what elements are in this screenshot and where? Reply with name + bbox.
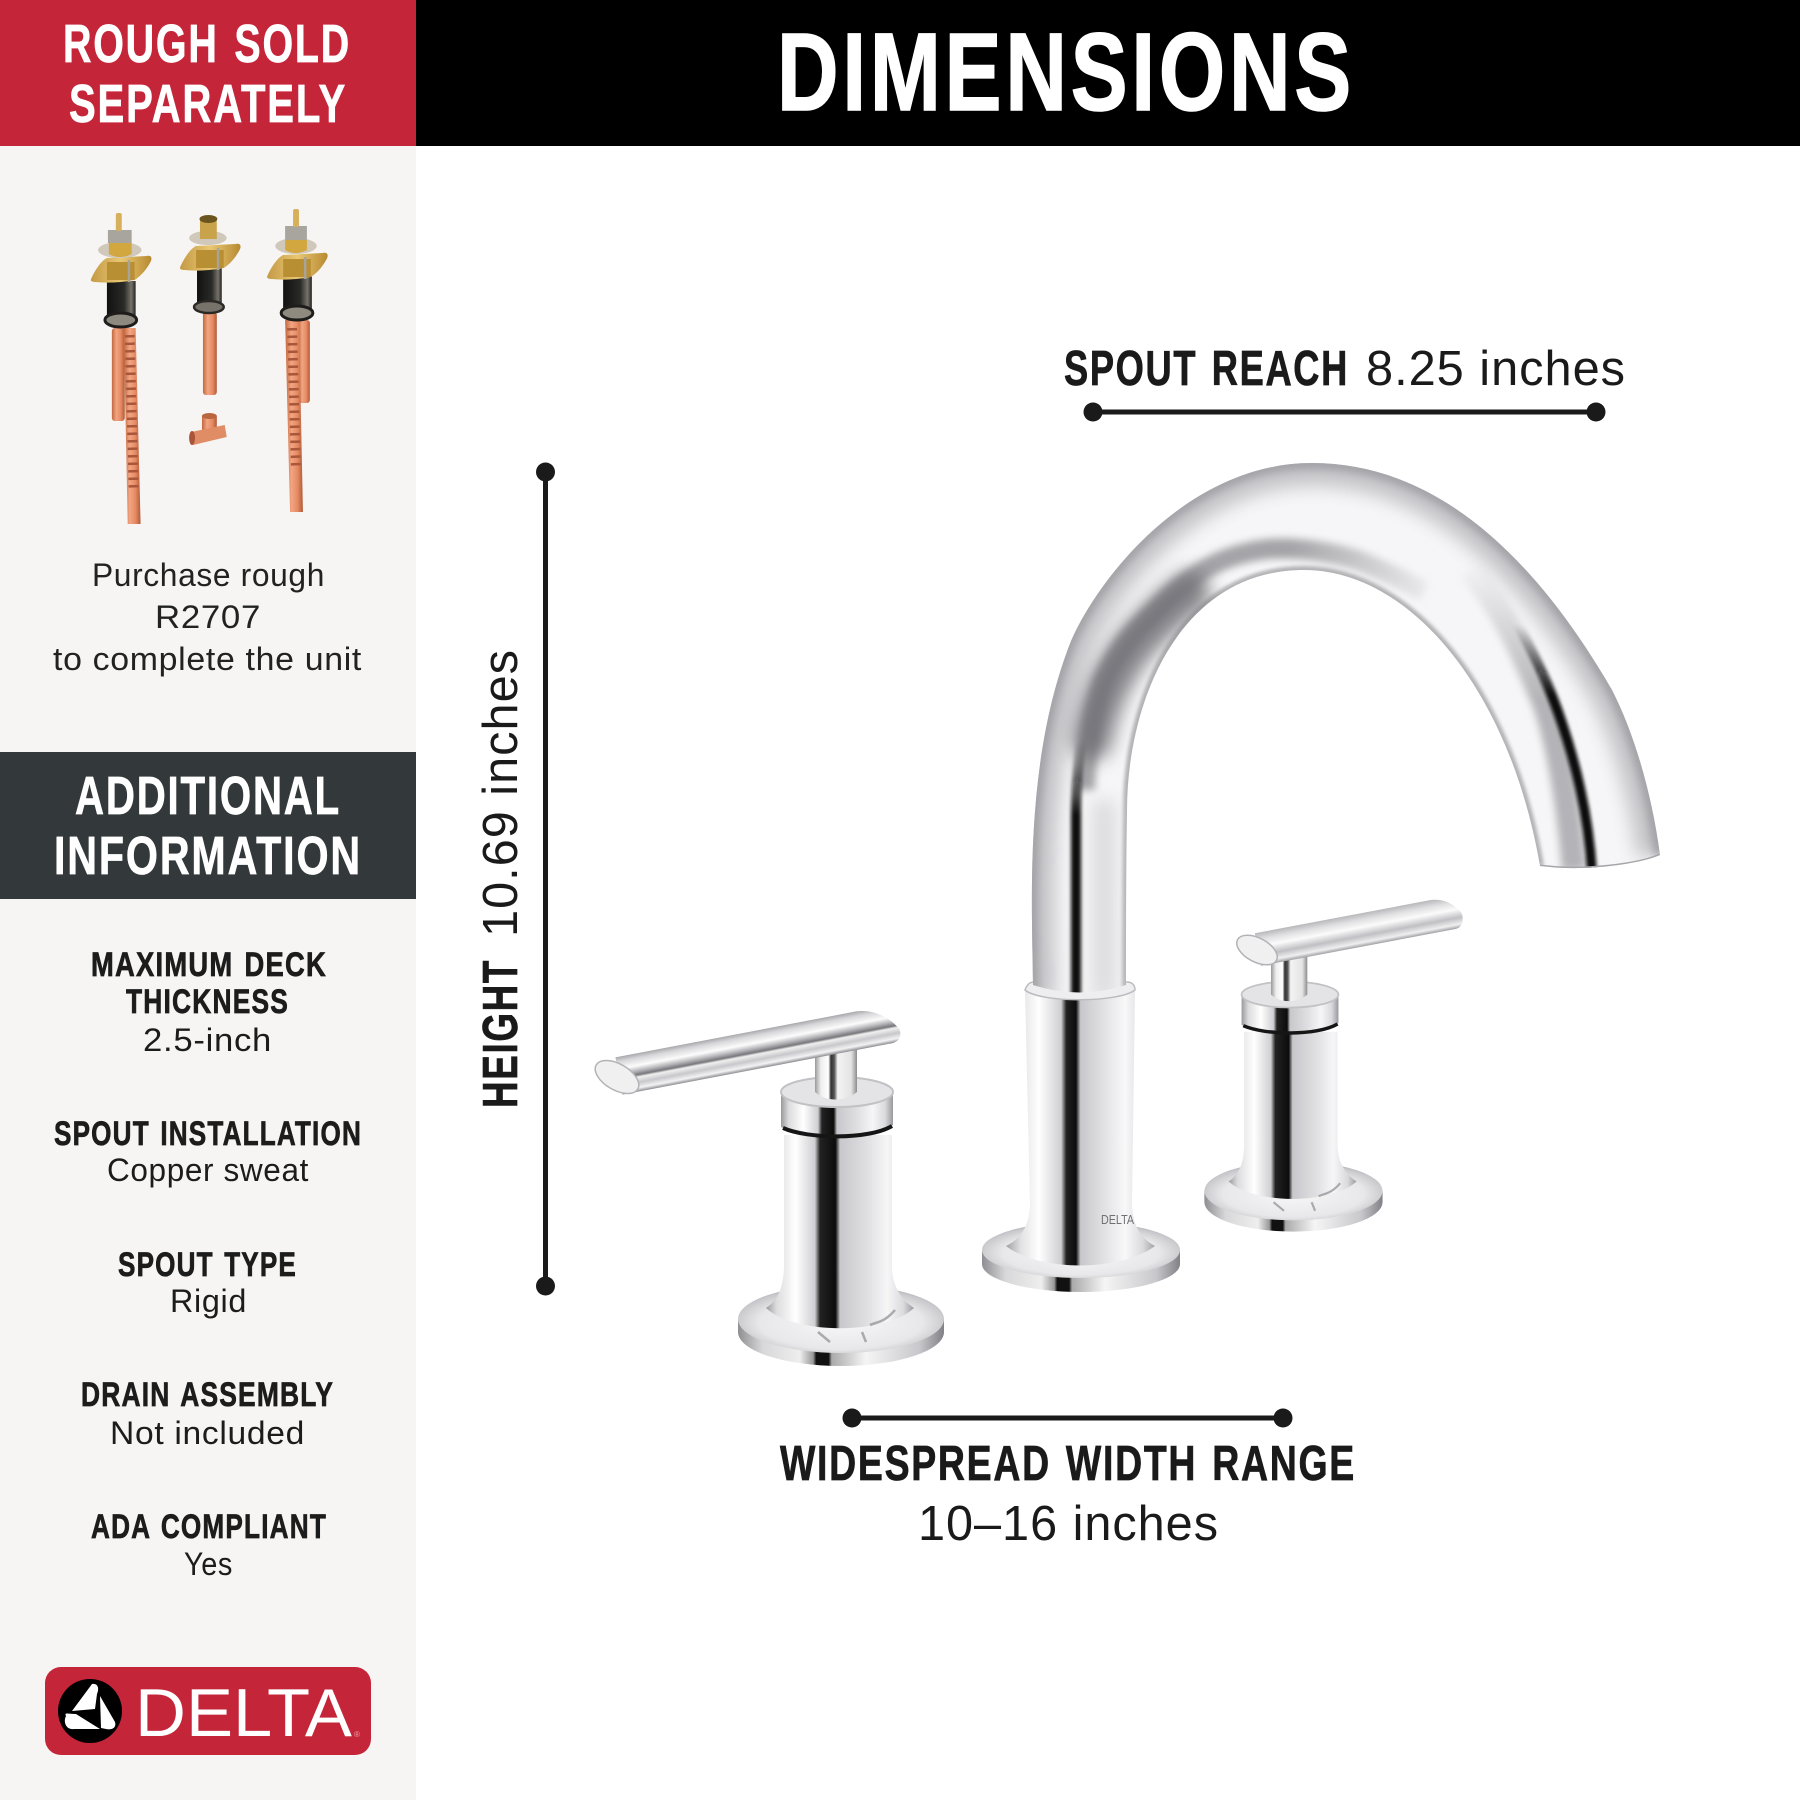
spec: drain assembly: Not included xyxy=(110,1415,305,1451)
spec: ada compliant: Yes xyxy=(184,1546,233,1582)
dimension: spout reach: SPOUT REACH xyxy=(1064,342,1349,396)
right handle xyxy=(1204,895,1465,1232)
logo: delta: ® xyxy=(354,1730,360,1739)
dimension: widespread width range: 10–16 inches xyxy=(918,1497,1219,1551)
header: rough sold separately: SEPARATELY xyxy=(69,74,347,134)
dimension: height xyxy=(474,462,555,1296)
spec: maximum deck thickness: 2.5-inch xyxy=(143,1022,272,1058)
spec: ada compliant xyxy=(91,1508,327,1582)
text: purchase rough: R2707 xyxy=(155,599,261,635)
dimension: widespread width range: WIDESPREAD WIDTH RANGE xyxy=(780,1437,1356,1491)
spec: drain assembly xyxy=(81,1376,334,1451)
panel: sidebar xyxy=(0,146,416,1800)
spec: spout installation xyxy=(54,1115,362,1188)
spec: ada compliant: ADA COMPLIANT xyxy=(91,1508,327,1546)
text: purchase rough: to complete the unit xyxy=(53,641,362,677)
copper tee xyxy=(189,413,227,445)
heading: additional information: INFORMATION xyxy=(54,826,362,886)
heading: additional information: ADDITIONAL xyxy=(75,766,341,826)
logo: delta xyxy=(45,1667,371,1755)
dimension: height: 10.69 inches xyxy=(474,649,528,937)
title: dimensions: DIMENSIONS xyxy=(777,11,1355,134)
text: purchase rough: Purchase rough xyxy=(92,557,325,593)
image: faucet xyxy=(590,440,1700,1366)
spec: spout type xyxy=(118,1246,297,1319)
spout base and collar xyxy=(982,982,1180,1292)
title: dimensions xyxy=(416,0,1800,146)
spout xyxy=(1032,463,1660,992)
dimension: spout reach xyxy=(1064,342,1626,422)
spec: drain assembly: DRAIN ASSEMBLY xyxy=(81,1376,334,1414)
text: purchase rough xyxy=(53,557,362,677)
spec: spout installation: SPOUT INSTALLATION xyxy=(54,1115,362,1153)
left handle xyxy=(590,1004,944,1366)
spec: maximum deck thickness: THICKNESS xyxy=(126,983,289,1021)
engraved brand: DELTA xyxy=(1101,1212,1134,1227)
spec: maximum deck thickness: MAXIMUM DECK xyxy=(91,946,327,984)
heading: additional information xyxy=(0,752,416,899)
spec: spout type: Rigid xyxy=(170,1283,247,1319)
spec: spout type: SPOUT TYPE xyxy=(118,1246,297,1284)
dimension: spout reach: 8.25 inches xyxy=(1366,342,1626,396)
dimension: height: HEIGHT xyxy=(474,959,528,1108)
header: rough sold separately xyxy=(0,0,416,146)
logo: delta: DELTA xyxy=(135,1675,353,1751)
dimension: widespread width range xyxy=(780,1408,1356,1551)
image: rough valve parts xyxy=(91,209,328,524)
left valve xyxy=(91,213,151,524)
right valve xyxy=(267,209,328,512)
spec: spout installation: Copper sweat xyxy=(107,1152,309,1188)
middle valve xyxy=(180,215,241,395)
spec: maximum deck thickness xyxy=(91,946,327,1058)
header: rough sold separately: ROUGH SOLD xyxy=(63,14,351,74)
